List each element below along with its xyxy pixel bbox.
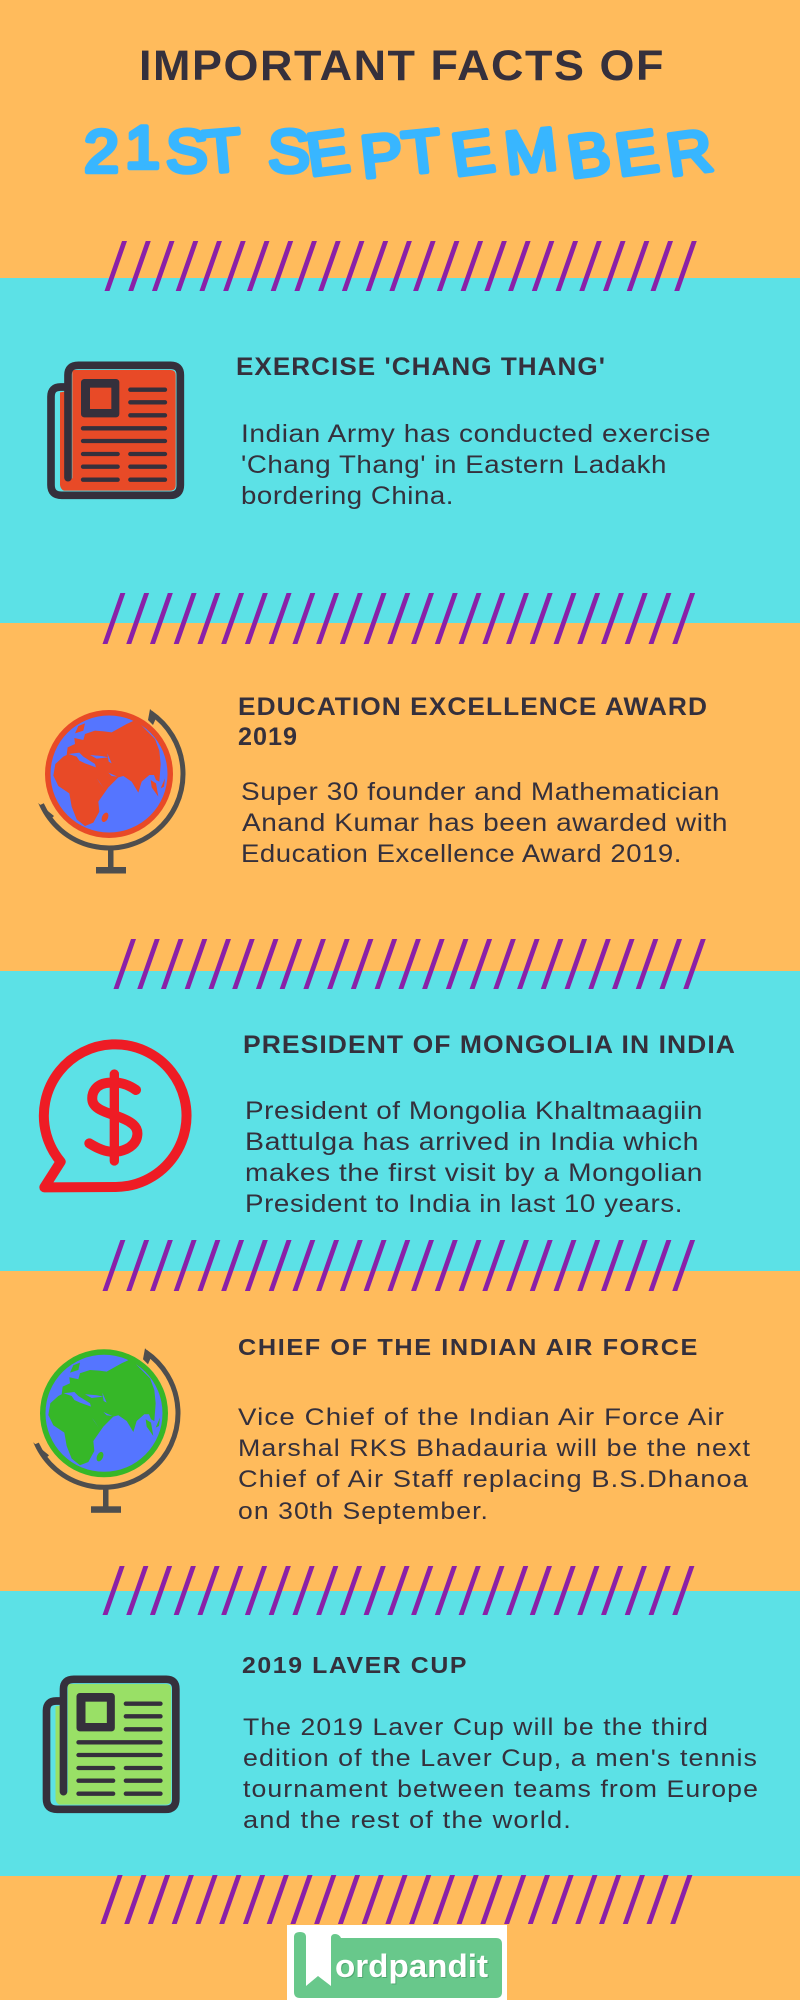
wordmark: ordpandit <box>335 1948 488 1984</box>
body text: bordering China. <box>241 482 454 510</box>
body text <box>241 778 728 868</box>
icon: green globe <box>33 1348 178 1513</box>
heading: EXERCISE 'CHANG THANG' <box>236 353 606 381</box>
body text: President to India in last 10 years. <box>245 1190 683 1218</box>
heading: PRESIDENT OF MONGOLIA IN INDIA <box>243 1031 736 1059</box>
title line: 21st september: 21ST SEPTEMBER <box>84 114 717 192</box>
body text: edition of the Laver Cup, a men's tennis <box>243 1745 758 1772</box>
body text: Super 30 founder and Mathematician <box>241 778 720 806</box>
body text <box>241 420 711 510</box>
body text: Anand Kumar has been awarded with <box>242 809 728 837</box>
body text <box>238 1404 751 1525</box>
panel: chief of the indian air force <box>0 1271 800 1591</box>
panel: president of mongolia <box>0 971 800 1271</box>
title line: important facts of: IMPORTANT FACTS OF <box>139 42 665 90</box>
body text: President of Mongolia Khaltmaagiin <box>245 1097 703 1125</box>
icon: red globe <box>38 709 183 874</box>
heading: EDUCATION EXCELLENCE AWARD <box>238 693 708 721</box>
heading: 2019 LAVER CUP <box>242 1652 468 1678</box>
icon: green newspaper <box>46 1679 176 1809</box>
panel: education excellence award <box>0 623 800 971</box>
icon: red newspaper <box>51 365 180 495</box>
body text: The 2019 Laver Cup will be the third <box>243 1714 709 1741</box>
logo: wordpandit <box>287 1925 507 2000</box>
panel: 2019 laver cup <box>0 1591 800 1876</box>
heading <box>238 693 708 751</box>
body text: Vice Chief of the Indian Air Force Air <box>238 1404 725 1431</box>
body text <box>243 1714 759 1834</box>
body text: Education Excellence Award 2019. <box>241 840 682 868</box>
body text: Battulga has arrived in India which <box>245 1128 699 1156</box>
body text <box>245 1097 703 1218</box>
body text: Marshal RKS Bhadauria will be the next <box>238 1435 751 1462</box>
body text: Chief of Air Staff replacing B.S.Dhanoa <box>238 1466 749 1493</box>
heading: 2019 <box>238 723 298 751</box>
body text: makes the first visit by a Mongolian <box>245 1159 703 1187</box>
panel: header <box>0 0 800 278</box>
body text: tournament between teams from Europe <box>243 1776 759 1803</box>
body text: and the rest of the world. <box>243 1807 572 1834</box>
body text: Indian Army has conducted exercise <box>241 420 711 448</box>
icon: dollar speech bubble <box>44 1044 187 1187</box>
body text: on 30th September. <box>238 1498 489 1525</box>
panel: exercise chang thang <box>0 278 800 623</box>
heading: CHIEF OF THE INDIAN AIR FORCE <box>238 1334 699 1360</box>
body text: 'Chang Thang' in Eastern Ladakh <box>241 451 667 479</box>
